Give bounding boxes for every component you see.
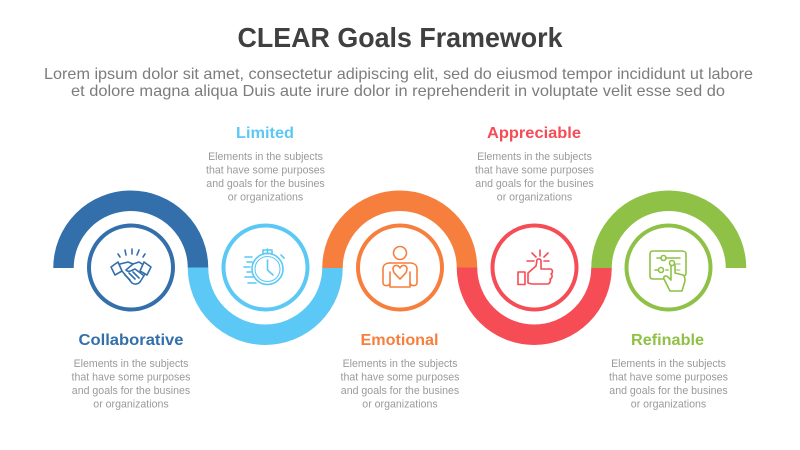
label: emotional: and goals for the busines (341, 385, 459, 397)
label: collaborative: that have some purposes (72, 372, 190, 384)
label: collaborative: and goals for the busines (72, 385, 190, 397)
subtitle (44, 66, 753, 100)
subtitle: et dolore magna aliqua Duis aute irure dolor in reprehenderit in voluptate velit esse sed do (71, 83, 725, 100)
icon: settings panel with hand (650, 251, 686, 291)
circle: refinable (626, 226, 710, 310)
label: appreciable (475, 125, 594, 204)
icon: handshake (111, 249, 151, 284)
label: limited: or organizations (228, 192, 303, 204)
label: refinable: that have some purposes (609, 372, 728, 384)
label: emotional: or organizations (362, 398, 438, 410)
wave band: refinable arc (602, 201, 736, 268)
label: collaborative: Collaborative (78, 332, 184, 349)
label: emotional (341, 332, 459, 410)
label: emotional: that have some purposes (341, 372, 459, 384)
label: limited (206, 125, 325, 204)
circle: limited (224, 226, 308, 310)
label: refinable: Refinable (631, 332, 704, 349)
label: collaborative: Elements in the subjects (74, 358, 188, 370)
wave band: emotional arc (332, 201, 467, 268)
label: appreciable: Appreciable (487, 125, 581, 142)
label: limited: that have some purposes (206, 164, 325, 176)
label: emotional: Elements in the subjects (343, 358, 457, 370)
wave band: limited arc (198, 268, 332, 335)
label: limited: Limited (236, 125, 294, 142)
label: emotional: Emotional (360, 332, 438, 349)
label: collaborative: or organizations (93, 398, 169, 410)
label: refinable: or organizations (631, 398, 706, 410)
circle: collaborative (89, 226, 173, 310)
wave band: collaborative arc (64, 201, 198, 268)
label: appreciable: Elements in the subjects (477, 151, 592, 163)
label: limited: Elements in the subjects (208, 151, 323, 163)
icon: person with heart (383, 246, 417, 287)
label: refinable: and goals for the busines (609, 385, 728, 397)
circle: emotional (358, 226, 442, 310)
label: appreciable: and goals for the busines (475, 178, 594, 190)
label: collaborative (72, 332, 190, 410)
circle: appreciable (492, 226, 576, 310)
wave band: appreciable arc (467, 268, 602, 335)
label: appreciable: that have some purposes (475, 164, 594, 176)
label: refinable: Elements in the subjects (611, 358, 726, 370)
label: limited: and goals for the busines (206, 178, 325, 190)
label: refinable (609, 332, 728, 410)
icon: stopwatch (244, 249, 284, 284)
icon: thumbs up (518, 250, 552, 284)
label: appreciable: or organizations (497, 192, 572, 204)
title: CLEAR Goals Framework (238, 22, 563, 53)
subtitle: Lorem ipsum dolor sit amet, consectetur adipiscing elit, sed do eiusmod tempor incididunt ut labore (44, 66, 753, 83)
